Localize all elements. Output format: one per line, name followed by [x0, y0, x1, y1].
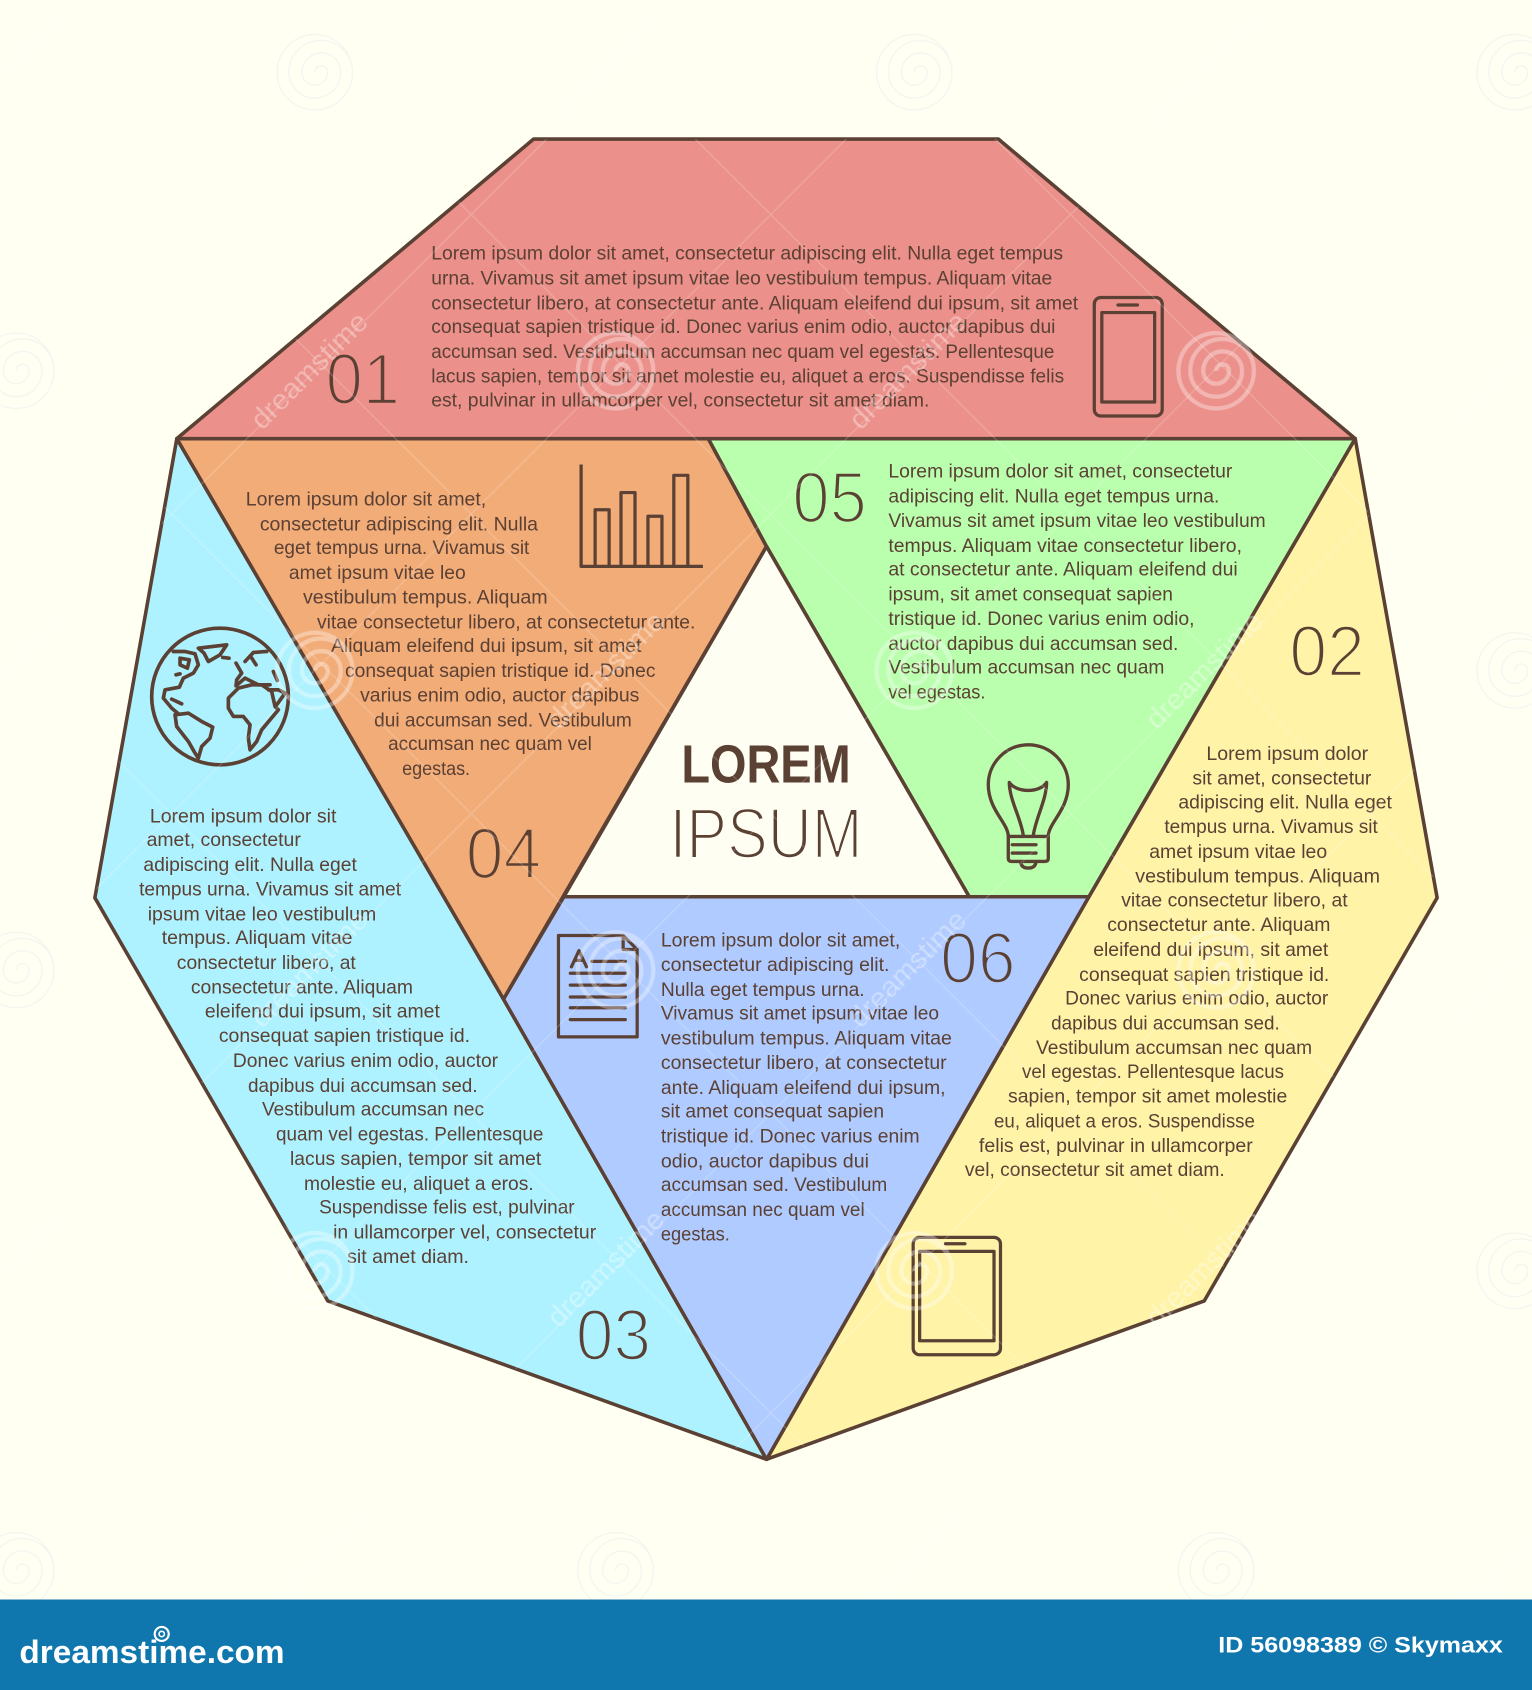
heading: LOREM: LOREM	[681, 734, 851, 794]
text block 03: ipsum vitae leo vestibulum	[148, 903, 376, 925]
text block 01: lacus sapien, tempor sit amet molestie eu, aliquet a eros. Suspendisse felis	[431, 366, 1064, 388]
text block 03: eleifend dui ipsum, sit amet	[205, 1000, 440, 1022]
text block 02	[965, 743, 1392, 1181]
text block 02: eleifend dui ipsum, sit amet	[1093, 939, 1329, 961]
text block 01: Lorem ipsum dolor sit amet, consectetur adipiscing elit. Nulla eget tempus	[431, 243, 1063, 265]
text block 05: Vivamus sit amet ipsum vitae leo vestibulum	[888, 510, 1266, 532]
panel 06: blue	[503, 897, 1089, 1459]
text block 04: accumsan nec quam vel	[388, 733, 592, 755]
icon: light bulb	[988, 745, 1068, 868]
text block 01	[431, 243, 1079, 411]
text block 05: auctor dapibus dui accumsan sed.	[888, 633, 1178, 655]
text block 03: tempus. Aliquam vitae	[162, 927, 353, 949]
text block 05: tempus. Aliquam vitae consectetur libero,	[888, 535, 1242, 557]
text block 05: tristique id. Donec varius enim odio,	[888, 608, 1195, 630]
text block 02: vel egestas. Pellentesque lacus	[1022, 1061, 1284, 1083]
text block 02: eu, aliquet a eros. Suspendisse	[994, 1110, 1255, 1132]
text block 05: adipiscing elit. Nulla eget tempus urna.	[888, 485, 1219, 507]
text block 05: Vestibulum accumsan nec quam	[888, 657, 1164, 679]
text block 03: quam vel egestas. Pellentesque	[276, 1123, 543, 1145]
text block 04: consectetur adipiscing elit. Nulla	[260, 513, 538, 535]
text block 06: Nulla eget tempus urna.	[661, 979, 865, 1001]
watermark overlay: dreamstime	[244, 1502, 375, 1632]
text block 02: dapibus dui accumsan sed.	[1051, 1012, 1280, 1034]
text block 04: egestas.	[402, 758, 470, 780]
text block 02: vestibulum tempus. Aliquam	[1135, 866, 1380, 888]
text block 05	[888, 460, 1266, 703]
text block 03: tempus urna. Vivamus sit amet	[139, 879, 402, 901]
text block 02: sit amet, consectetur	[1192, 768, 1372, 790]
text block 03: lacus sapien, tempor sit amet	[290, 1148, 542, 1170]
text block 04: Lorem ipsum dolor sit amet,	[246, 488, 486, 510]
footer logo: dreamstime.com	[19, 1634, 285, 1670]
text block 03: in ullamcorper vel, consectetur	[333, 1221, 597, 1243]
text block 03: dapibus dui accumsan sed.	[248, 1075, 478, 1097]
text block 03: amet, consectetur	[147, 829, 301, 851]
text block 04: eget tempus urna. Vivamus sit	[274, 537, 530, 559]
text block 02: amet ipsum vitae leo	[1149, 841, 1327, 863]
panel 05: green	[708, 439, 1355, 897]
watermark overlay: dreamstime	[843, 1502, 973, 1632]
text block 06: tristique id. Donec varius enim	[661, 1125, 920, 1147]
text block 03: consectetur ante. Aliquam	[191, 977, 413, 999]
text block 02: consequat sapien tristique id.	[1079, 964, 1329, 986]
text block 06: accumsan nec quam vel	[661, 1199, 865, 1221]
text block 01: consequat sapien tristique id. Donec varius enim odio, auctor dapibus dui	[431, 316, 1055, 338]
text block 04: varius enim odio, auctor dapibus	[360, 685, 639, 707]
text block 06: consectetur libero, at consectetur	[661, 1052, 947, 1074]
watermark overlay: dreamstime	[1139, 1204, 1269, 1334]
text block 01: est, pulvinar in ullamcorper vel, consectetur sit amet diam.	[431, 389, 929, 411]
text block 02: sapien, tempor sit amet molestie	[1008, 1086, 1287, 1108]
text block 06: consectetur adipiscing elit.	[661, 954, 889, 976]
text block 03	[139, 805, 597, 1268]
text block 04: vestibulum tempus. Aliquam	[303, 587, 548, 609]
watermark overlay: dreamstime	[244, 306, 375, 436]
watermark overlay: dreamstime	[244, 904, 375, 1034]
panel 01: red	[177, 139, 1355, 439]
text block 02: tempus urna. Vivamus sit	[1164, 816, 1378, 838]
icon: globe	[152, 628, 288, 765]
text block 03: adipiscing elit. Nulla eget	[143, 854, 357, 876]
text block 03: sit amet diam.	[347, 1246, 469, 1268]
text block 04: Aliquam eleifend dui ipsum, sit amet	[331, 635, 642, 657]
text block 06: sit amet consequat sapien	[661, 1101, 884, 1123]
watermark overlay: dreamstime	[843, 306, 973, 436]
panel 04: orange	[177, 439, 767, 999]
number 01: 01	[326, 340, 400, 420]
text block 02: adipiscing elit. Nulla eget	[1178, 791, 1392, 813]
text block 06: ante. Aliquam eleifend dui ipsum,	[661, 1077, 946, 1099]
text block 05: vel egestas.	[888, 681, 985, 703]
number 06: 06	[940, 919, 1016, 999]
text block 04: consequat sapien tristique id. Donec	[345, 660, 656, 682]
text block 06: Vivamus sit amet ipsum vitae leo	[661, 1003, 939, 1025]
text block 06: egestas.	[661, 1224, 730, 1246]
text block 03: Donec varius enim odio, auctor	[233, 1050, 499, 1072]
panel: centre triangle	[564, 546, 969, 897]
text block 04	[246, 488, 695, 780]
watermark overlay: dreamstime	[843, 904, 973, 1034]
watermark overlay: dreamstime	[1139, 4, 1269, 134]
icon: smartphone	[1094, 297, 1162, 416]
text block 03: Suspendisse felis est, pulvinar	[319, 1197, 575, 1219]
text block 02: Lorem ipsum dolor	[1206, 743, 1369, 765]
icon: tablet	[913, 1237, 1000, 1355]
text block 04: amet ipsum vitae leo	[289, 562, 466, 584]
number 02: 02	[1289, 612, 1365, 692]
watermark overlay: dreamstime	[541, 605, 671, 736]
text block 02: felis est, pulvinar in ullamcorper	[979, 1135, 1253, 1157]
panel 02: yellow	[767, 439, 1437, 1459]
text block 06: vestibulum tempus. Aliquam vitae	[661, 1027, 952, 1049]
watermark overlay: dreamstime	[1139, 605, 1269, 736]
text block 06: Lorem ipsum dolor sit amet,	[661, 929, 900, 951]
text block 06: odio, auctor dapibus dui	[661, 1150, 869, 1172]
text block 04: vitae consectetur libero, at consectetur ante.	[317, 611, 695, 633]
text block 03: Lorem ipsum dolor sit	[150, 805, 337, 827]
text block 02: consectetur ante. Aliquam	[1107, 914, 1330, 936]
text block 01: consectetur libero, at consectetur ante. Aliquam eleifend dui ipsum, sit amet	[431, 292, 1079, 314]
text block 02: vitae consectetur libero, at	[1121, 889, 1348, 911]
footer bar	[0, 1599, 1532, 1690]
text block 01: urna. Vivamus sit amet ipsum vitae leo vestibulum tempus. Aliquam vitae	[431, 268, 1052, 290]
icon: document	[558, 936, 637, 1037]
text block 02: vel, consectetur sit amet diam.	[965, 1159, 1225, 1181]
text block 03: Vestibulum accumsan nec	[262, 1099, 484, 1121]
text block 03: consequat sapien tristique id.	[219, 1025, 470, 1047]
footer credit: ID 56098389 © Skymaxx	[1218, 1632, 1503, 1657]
text block 02: Donec varius enim odio, auctor	[1065, 988, 1329, 1010]
watermark overlay: dreamstime	[541, 1204, 671, 1334]
text block 03: molestie eu, aliquet a eros.	[304, 1173, 534, 1195]
icon: bar chart	[581, 465, 703, 566]
text block 06	[661, 929, 952, 1246]
text block 01: accumsan sed. Vestibulum accumsan nec quam vel egestas. Pellentesque	[431, 341, 1054, 363]
text block 04: dui accumsan sed. Vestibulum	[374, 709, 632, 731]
text block 05: ipsum, sit amet consequat sapien	[888, 583, 1173, 605]
text block 02: Vestibulum accumsan nec quam	[1036, 1037, 1312, 1059]
watermark overlay: dreamstime	[541, 4, 671, 134]
text block 03: consectetur libero, at	[177, 952, 356, 974]
text block 06: accumsan sed. Vestibulum	[661, 1174, 887, 1196]
number 03: 03	[576, 1296, 651, 1376]
text block 05: at consectetur ante. Aliquam eleifend dui	[888, 559, 1238, 581]
panel 03: cyan	[95, 439, 767, 1459]
number 04: 04	[466, 814, 541, 894]
heading: IPSUM: IPSUM	[670, 795, 862, 874]
number 05: 05	[792, 459, 867, 539]
text block 05: Lorem ipsum dolor sit amet, consectetur	[888, 460, 1233, 482]
